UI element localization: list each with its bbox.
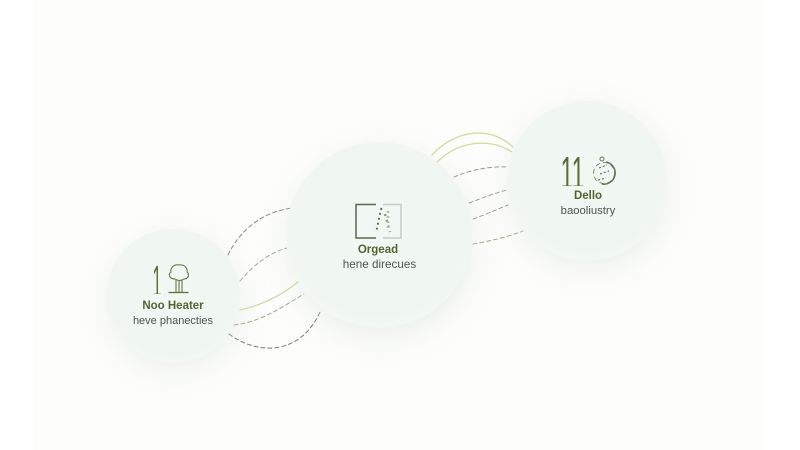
circle: right [507,101,669,269]
circle: left [106,229,241,370]
icon: tree [168,265,188,292]
label: hene direcues: hene direcues [343,258,416,271]
number 11: 11 [560,147,584,199]
circle: centre [286,142,473,336]
circle: left: 1 [152,256,162,307]
connectors: left to centre [228,208,321,348]
heading: Noo Heater: Noo Heater [142,300,204,312]
connectors: centre to right [432,133,523,244]
heading: Orgead: Orgead [358,244,398,256]
label: baooliustry: baooliustry [561,205,616,217]
label: heve phanecties: heve phanecties [133,315,214,327]
heading: Dello: Dello [574,190,602,202]
icon: book with plant [356,204,401,238]
icon: round plant [594,157,615,184]
